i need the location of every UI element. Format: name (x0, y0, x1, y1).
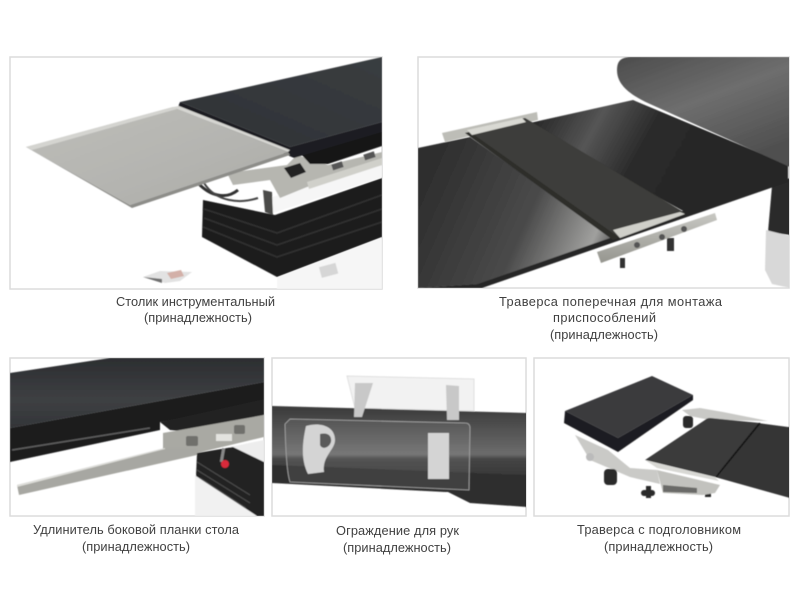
caption: head rest bar: (принадлежность) (604, 539, 713, 554)
photo frame (272, 358, 526, 516)
caption: instrument table: Столик инструментальный (116, 294, 275, 309)
caption: instrument table: (принадлежность) (144, 310, 252, 325)
caption: side rail extender: Удлинитель боковой планки стола (33, 522, 240, 537)
panel: head rest bar (534, 358, 790, 516)
caption: transverse bar: Траверса поперечная для монтажа (499, 294, 723, 309)
photo: instrument tray on operating table (26, 57, 382, 289)
photo: cross bar with head rest (564, 376, 790, 498)
panel: side rail extender (10, 358, 264, 516)
caption: head rest bar (577, 522, 741, 554)
caption: instrument table (116, 294, 275, 325)
photo frame (10, 358, 264, 516)
caption: transverse bar: приспособлений (553, 310, 656, 325)
caption: transverse bar (499, 294, 723, 342)
photo frame (10, 57, 382, 289)
caption: arm guard: Ограждение для рук (336, 523, 459, 538)
photo: rail extender (10, 358, 264, 516)
caption: arm guard: (принадлежность) (343, 540, 451, 555)
panel: transverse bar (418, 57, 790, 288)
panel: arm guard (272, 358, 527, 516)
photo frame (418, 57, 789, 288)
panel: instrument table (10, 57, 382, 289)
caption: side rail extender: (принадлежность) (82, 539, 190, 554)
photo frame (534, 358, 789, 516)
caption: side rail extender (33, 522, 240, 554)
photo: arm guard (272, 376, 527, 507)
caption: head rest bar: Траверса с подголовником (577, 522, 741, 537)
caption: arm guard (336, 523, 459, 555)
caption: transverse bar: (принадлежность) (550, 327, 658, 342)
photo: cross bar on table (418, 57, 790, 288)
